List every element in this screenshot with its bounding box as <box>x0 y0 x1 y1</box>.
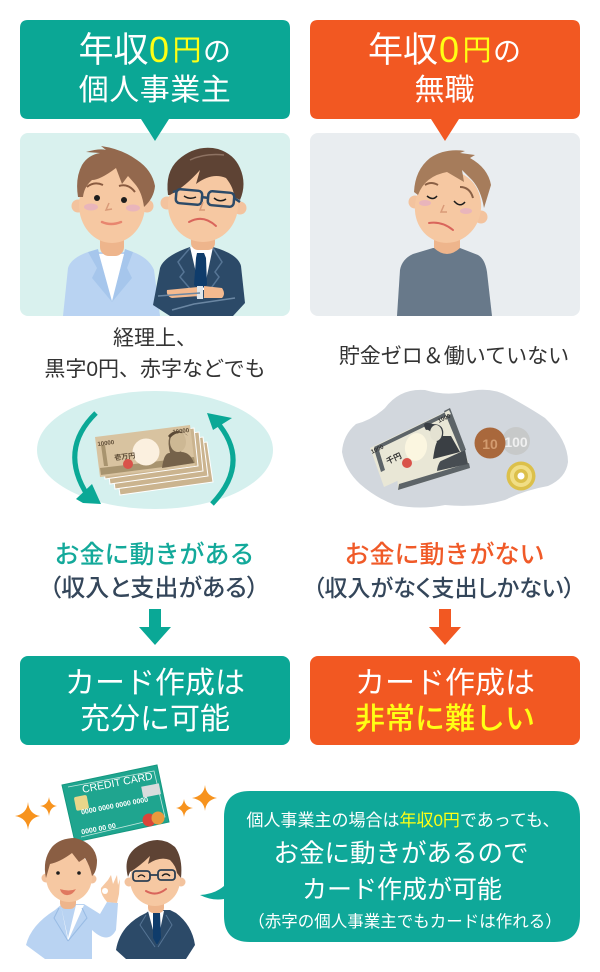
icon: stack of 10000 yen notes: 10000 <box>172 428 190 436</box>
speech bubble: conclusion: カード作成が可能 <box>302 876 502 904</box>
icon: 5 yen coin <box>506 462 536 490</box>
icon: casual man with OK hand <box>26 838 120 959</box>
speech bubble: conclusion: お金に動きがあるので <box>273 840 529 868</box>
result box: difficult: 非常に難しい <box>355 703 535 736</box>
icon: 100 yen coin <box>502 427 530 455</box>
callout heading: self-employed: 円 <box>172 35 202 67</box>
callout heading: unemployed: 年収 <box>368 31 438 70</box>
icon: casual man <box>63 146 160 316</box>
panel: self-employed illustration <box>20 133 290 316</box>
text: self-employed note: 黒字0円、赤字などでも <box>44 358 266 381</box>
callout heading: unemployed: 無職 <box>414 74 474 107</box>
result box: possible: カード作成は <box>65 667 245 700</box>
text: unemployed note: 貯金ゼロ＆働いていない <box>339 345 569 368</box>
illustration: circulating money <box>37 391 273 509</box>
icon: credit card: 0000 00 00 <box>81 823 117 836</box>
label: money does not move: お金に動きがない <box>344 541 545 569</box>
result box: difficult <box>310 656 580 745</box>
callout heading: self-employed: 年収 <box>78 31 149 70</box>
speech bubble: conclusion: （赤字の個人事業主でもカードは作れる） <box>248 912 562 931</box>
arrow: left arc <box>75 413 101 504</box>
text: self-employed note <box>44 327 266 381</box>
icon: stack of 10000 yen notes: 10000 <box>97 440 115 448</box>
icon: 10 yen coin: 10 <box>482 436 498 452</box>
icon: credit card: 0000 0000 0000 0000 <box>81 797 149 816</box>
callout heading: self-employed: の <box>203 36 231 67</box>
label: money does not move <box>313 541 575 601</box>
result box: possible <box>20 656 290 745</box>
icon: man in suit smiling <box>116 840 195 959</box>
speech bubble: conclusion: 個人事業主の場合は年収0円であっても、 <box>246 811 560 830</box>
icon: man in suit with arms crossed <box>153 148 246 316</box>
icon: stack of 10000 yen notes <box>95 425 213 495</box>
callout heading: self-employed <box>20 20 290 141</box>
speech bubble: conclusion <box>200 791 580 942</box>
icon: sparkles <box>15 785 217 830</box>
icon: stack of 10000 yen notes: 壱万円 <box>114 451 136 462</box>
label: money does not move: （収入がなく支出しかない） <box>313 575 575 601</box>
callout heading: unemployed: 円 <box>462 35 492 67</box>
arrow: orange down <box>429 609 461 645</box>
icon: credit card: CREDIT CARD <box>81 770 154 796</box>
callout heading: unemployed: の <box>493 36 521 67</box>
icon: 10 yen coin <box>474 428 506 458</box>
result box: possible: 充分に可能 <box>80 703 230 736</box>
icon: unemployed man <box>397 150 492 316</box>
label: money moves: お金に動きがある <box>54 541 255 569</box>
callout heading: self-employed: 個人事業主 <box>79 74 231 107</box>
icon: 1000 yen notes: 1000 <box>370 444 385 456</box>
icon: 100 yen coin: 100 <box>504 434 528 450</box>
icon: credit card <box>62 765 169 842</box>
text: self-employed note: 経理上、 <box>113 327 197 350</box>
illustration: stagnant money <box>342 390 568 508</box>
label: money moves <box>49 541 259 602</box>
callout heading: self-employed: 0 <box>149 29 169 70</box>
panel: unemployed illustration <box>310 133 580 316</box>
arrow: right arc <box>207 413 233 504</box>
icon: 1000 yen notes <box>370 408 470 490</box>
icon: 1000 yen notes: 1000 <box>437 413 452 425</box>
label: money moves: （収入と支出がある） <box>49 575 259 602</box>
icon: 1000 yen notes: 千円 <box>384 450 403 466</box>
arrow: teal down <box>139 609 171 645</box>
callout heading: unemployed <box>310 20 580 141</box>
result box: difficult: カード作成は <box>355 667 535 700</box>
callout heading: unemployed: 0 <box>439 29 459 70</box>
